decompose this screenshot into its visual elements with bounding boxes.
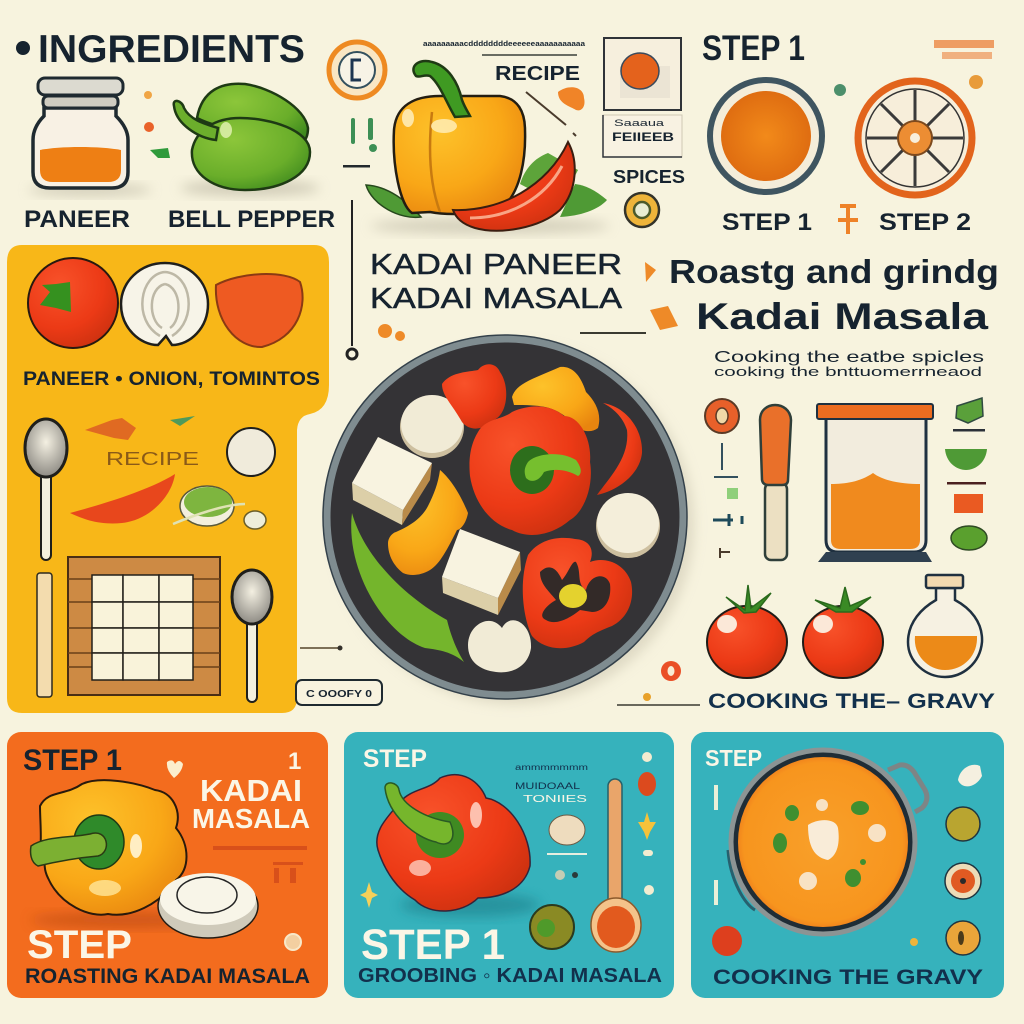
icon: yellow bell pepper hero — [366, 61, 610, 234]
icon: olive ring — [625, 193, 659, 227]
yellow pepper middle — [388, 470, 468, 575]
icon: tomato right — [803, 587, 883, 678]
chart: main kadai dish — [323, 335, 694, 704]
label: step: STEP — [363, 745, 427, 773]
icon: spice jar — [28, 78, 152, 196]
icon: wooden board with paneer cubes — [68, 557, 220, 695]
title: kadai paneer: KADAI MASALA — [370, 283, 623, 315]
heading: roasting and grinding — [669, 253, 999, 337]
label: kadai masala: KADAI — [200, 773, 302, 808]
icon: recipe card: Saaaua — [614, 118, 664, 128]
label: step 1: STEP 1 — [361, 921, 505, 969]
icon: orange wheel — [858, 81, 972, 195]
label: cooking the gravy: COOKING THE GRAVY — [713, 966, 983, 989]
text: cooking the spices — [714, 349, 984, 379]
icon: side specks — [642, 752, 654, 895]
icon: side ingredients — [712, 765, 982, 956]
label: kadai masala: MASALA — [192, 803, 310, 834]
heading: roasting and grinding: Roastg and grindg — [669, 253, 999, 290]
red pepper central — [469, 406, 591, 535]
icon: sparkle — [360, 882, 378, 908]
red pepper ring — [523, 538, 632, 648]
icon: small side marks — [713, 443, 742, 558]
icon: small spices cluster — [85, 416, 195, 440]
title: kadai paneer: KADAI PANEER — [370, 249, 622, 281]
icon: orange sprigs — [378, 262, 678, 341]
icon: pale seed — [244, 511, 266, 529]
decorative: short rule and mark — [547, 853, 587, 880]
label: grooming kadai masala: GROOBING ◦ KADAI MASALA — [358, 965, 662, 987]
icon: star — [638, 812, 656, 840]
small label box: C OOOFY 0 — [306, 689, 373, 700]
icon: seed — [549, 815, 585, 845]
green pepper strip — [351, 513, 464, 662]
label: paneer onion tomatoes: PANEER • ONION, TOMINTOS — [23, 369, 320, 390]
red pepper piece top — [442, 364, 506, 429]
icon: side ring — [705, 399, 739, 433]
yellow pepper piece top — [512, 367, 599, 431]
red strip right — [597, 403, 642, 495]
icon: tomato slice — [216, 274, 303, 347]
white mushroom piece — [468, 620, 531, 672]
label: recipe: RECIPE — [495, 63, 580, 85]
label: step 2: STEP 2 — [879, 209, 971, 236]
icon: recipe card — [603, 38, 682, 157]
label: cooking the gravy: COOKING THE– GRAVY — [708, 690, 995, 713]
icon: spoon right — [232, 570, 272, 702]
icon: orange connector — [838, 206, 858, 234]
icon: small green leaf marks — [343, 118, 377, 168]
icon: knife stick — [37, 573, 52, 697]
icon: tomato left — [707, 585, 787, 678]
white slice right — [596, 493, 660, 558]
icon: red chili — [70, 474, 175, 523]
label: step 1: STEP 1 — [23, 744, 122, 777]
icon: bowl of spice — [710, 80, 822, 192]
panel: step 1 grooming (teal) — [344, 732, 674, 998]
icon: onion — [121, 263, 208, 345]
decorative marks: header bars — [834, 40, 994, 96]
icon: round badge — [329, 42, 385, 98]
text: tiny header line: aaaaaaaaacddddddddeeeeeeaaaaaaaaaaa — [423, 41, 585, 48]
small pin — [617, 661, 700, 705]
paneer cube 1 — [352, 437, 432, 525]
icon: side ingredients column — [945, 398, 987, 550]
text: small caption: MUIDOAAL — [515, 781, 580, 791]
label: bell pepper: BELL PEPPER — [168, 206, 335, 233]
text: small caption — [515, 763, 588, 805]
text: cooking the spices: Cooking the eatbe spicles — [714, 349, 984, 366]
white round piece — [400, 395, 464, 458]
label: step: STEP — [705, 745, 762, 771]
label: kadai masala — [192, 773, 310, 834]
icon: green bell pepper — [174, 84, 320, 196]
label: step: STEP — [27, 923, 132, 967]
decorative: dash marks — [213, 846, 307, 883]
label: number 1: 1 — [288, 748, 301, 775]
icon: glass flask — [908, 575, 982, 677]
label: step 1: STEP 1 — [722, 209, 812, 236]
icon: orange spice dot — [558, 87, 585, 110]
paneer cube 2 — [442, 529, 521, 615]
icon: yellow pepper — [30, 780, 230, 928]
label: paneer: PANEER — [24, 206, 130, 233]
icon: blender jar — [817, 404, 933, 562]
text: small caption: TONIIES — [523, 794, 588, 805]
label: spices: SPICES — [613, 167, 685, 187]
title: kadai paneer — [370, 249, 623, 315]
text: cooking the spices: cooking the bnttuomerrneaod — [714, 364, 982, 379]
icon: green cardamom — [173, 486, 245, 526]
label: roasting kadai masala: ROASTING KADAI MASALA — [25, 965, 310, 988]
panel: yellow ingredients — [7, 245, 329, 713]
panel: step 1 kadai masala (orange) — [7, 732, 328, 998]
icon: onion slice — [158, 873, 258, 938]
icon: wooden spatula — [760, 405, 791, 560]
icon: small ring — [285, 934, 301, 950]
icon: red pepper — [377, 775, 540, 917]
icon: small heart — [167, 760, 183, 778]
icon: tomato — [28, 258, 118, 348]
heading: ingredients: INGREDIENTS — [38, 28, 305, 71]
label: recipe: RECIPE — [106, 449, 199, 469]
heading: roasting and grinding: Kadai Masala — [696, 296, 989, 337]
icon: wooden spoon — [591, 779, 641, 952]
panel: step cooking gravy (teal) — [691, 732, 1004, 998]
icon: recipe card: FEIIEEB — [612, 130, 674, 144]
icon: olive — [530, 905, 574, 949]
icon: white round — [227, 428, 275, 476]
connector line to board — [300, 646, 342, 650]
text: small caption: ammmmmmm — [515, 763, 588, 772]
decorative: dashed pointer — [526, 92, 576, 136]
icon: small orange and green specks — [144, 91, 170, 158]
heading: step 1: STEP 1 — [702, 29, 805, 68]
icon: red dot — [638, 772, 656, 796]
icon: spoon left top — [25, 419, 67, 560]
decorative: vertical rule — [347, 200, 357, 359]
icon: pot of gravy — [728, 750, 927, 934]
small label box — [296, 680, 382, 705]
